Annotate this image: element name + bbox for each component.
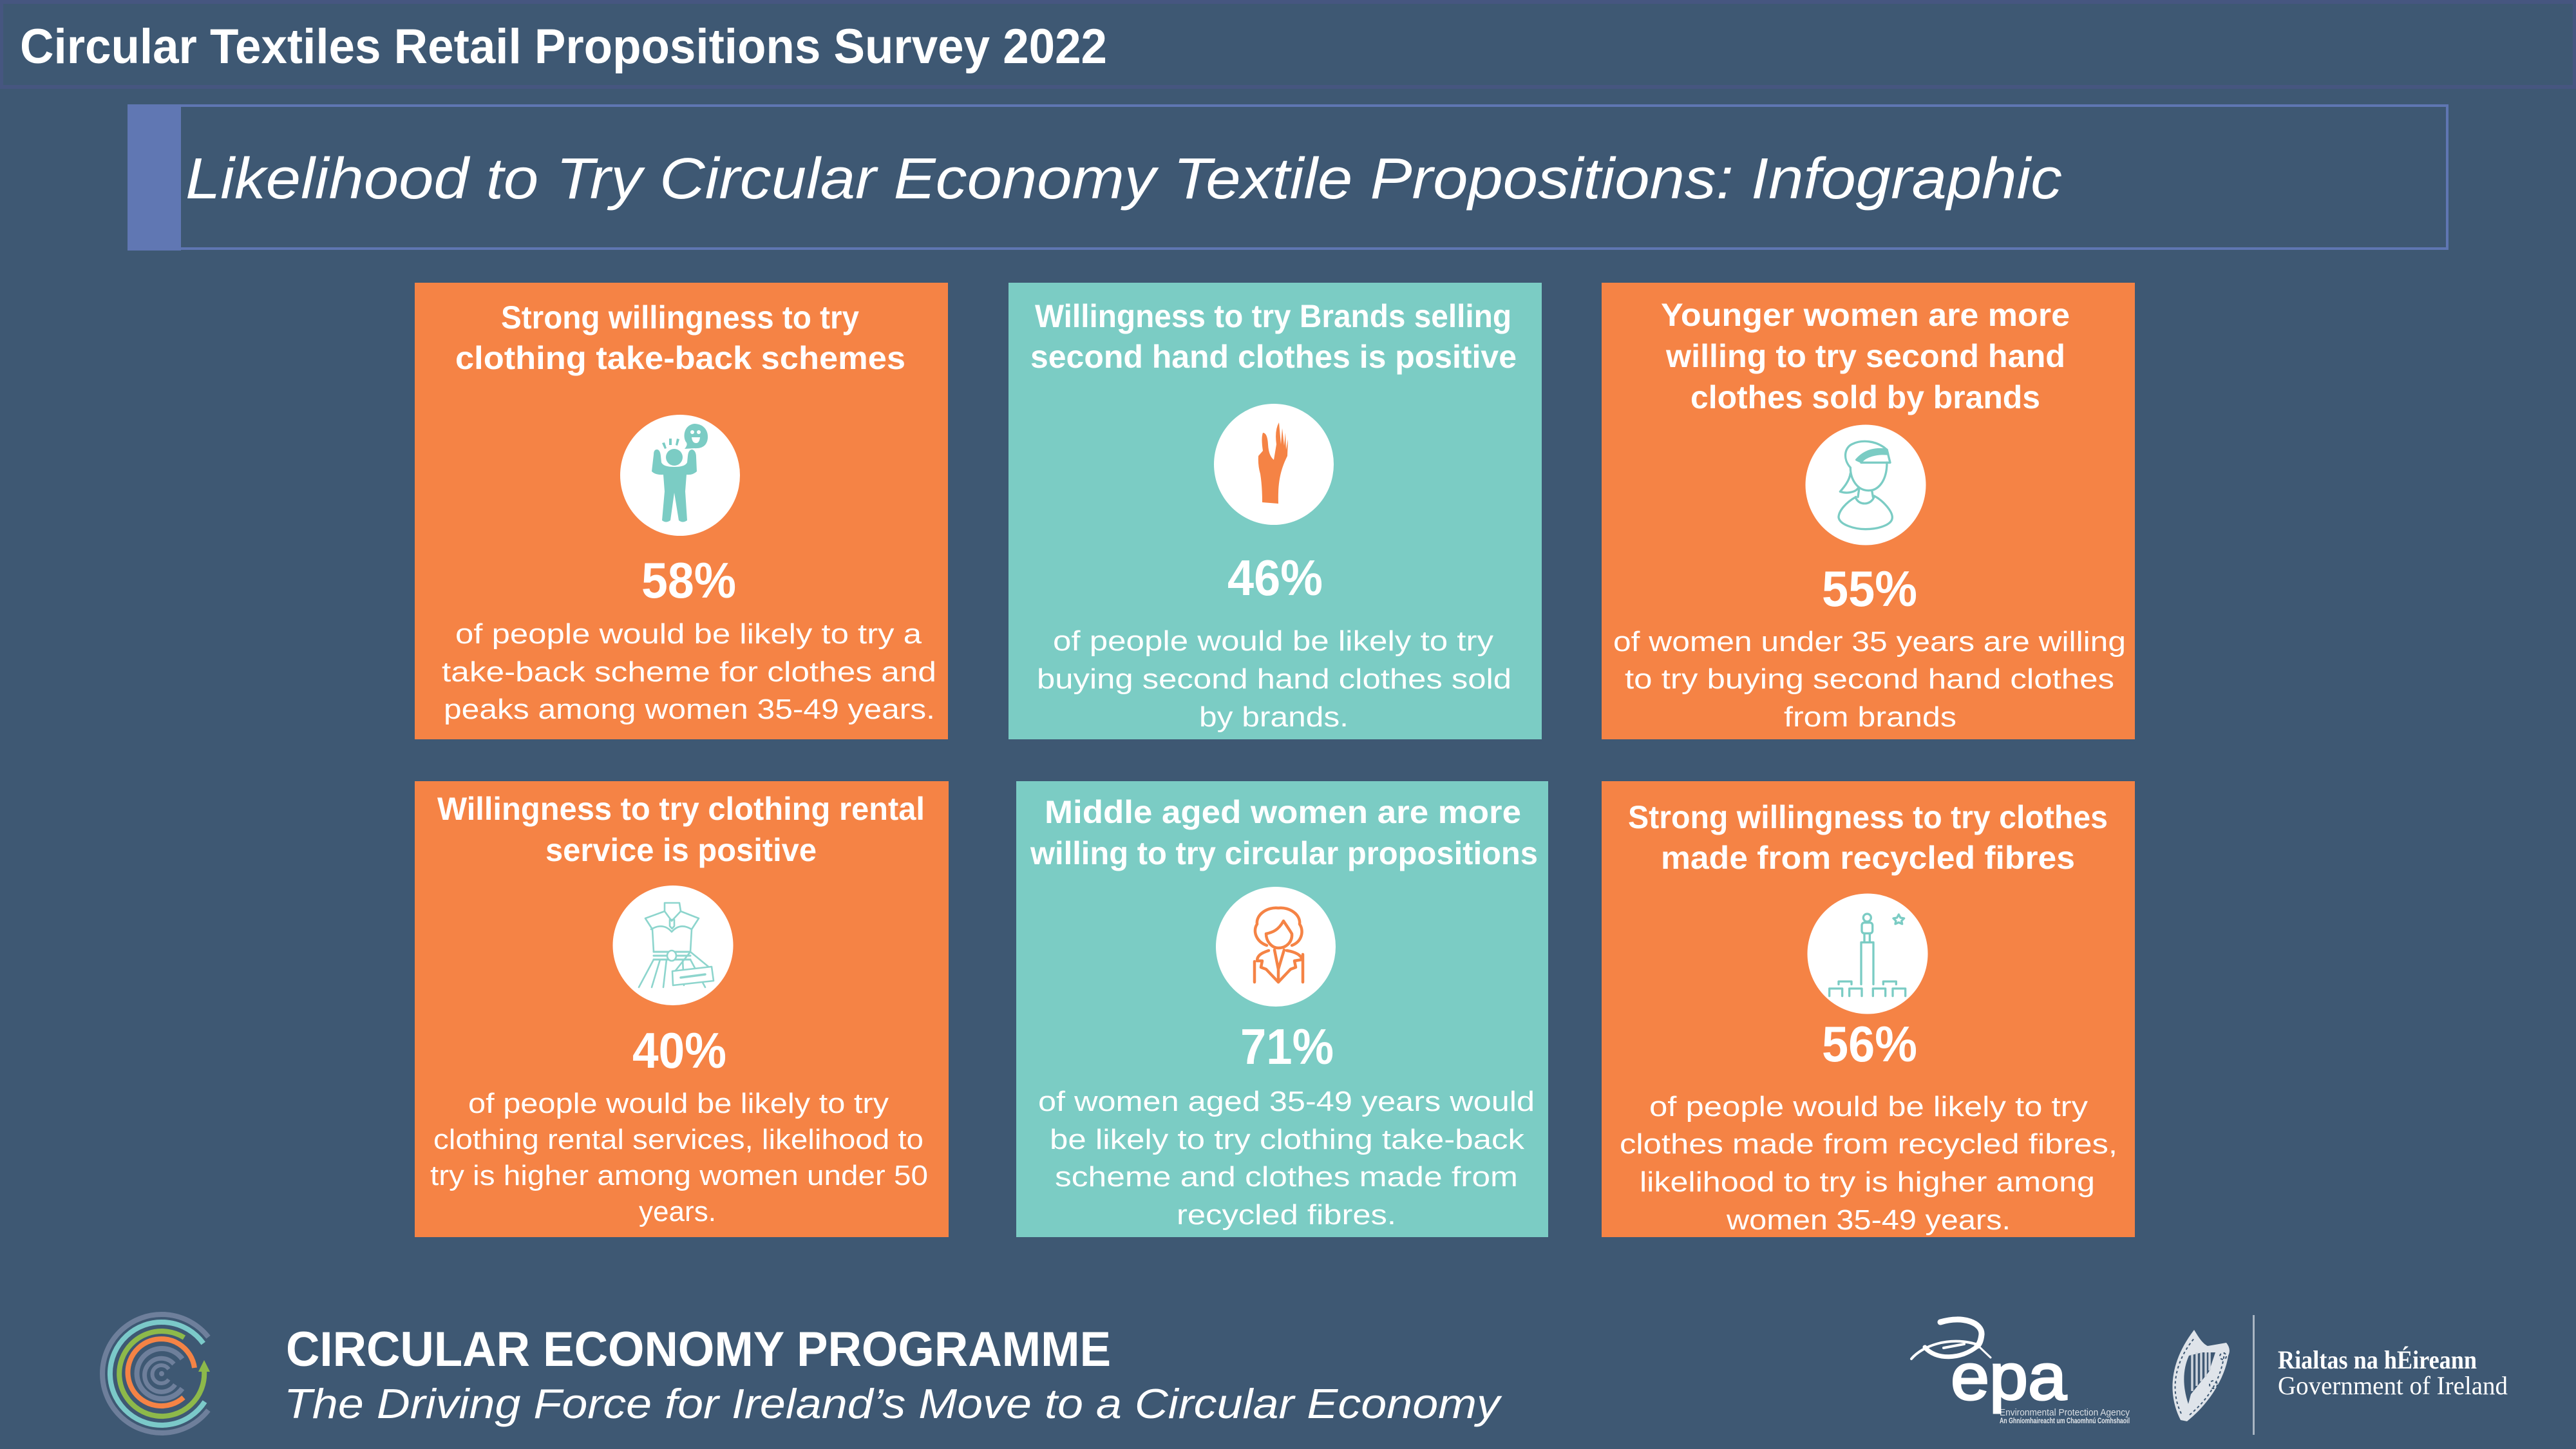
icon: young woman with headband <box>1806 425 1926 545</box>
body: recycled fibres: of people would be likely to try <box>1649 1091 2088 1122</box>
logo: EPA <box>1911 1320 2130 1425</box>
icon: raised hand <box>1214 404 1334 525</box>
heading: brands selling second hand <box>1030 298 1517 375</box>
heading: middle aged women: willing to try circular propositions <box>1030 835 1538 871</box>
subtitle panel <box>128 104 2447 251</box>
body: younger women: from brands <box>1784 701 1956 733</box>
body: brands selling second hand: by brands. <box>1199 701 1349 733</box>
heading: younger women <box>1661 297 2070 415</box>
panel: middle aged women <box>1016 781 1548 1237</box>
body: clothing rental: clothing rental services, likelihood to <box>433 1124 923 1155</box>
heading: recycled fibres: Strong willingness to try clothes <box>1628 799 2108 835</box>
logo: EPA: Environmental Protection Agency <box>2000 1407 2130 1418</box>
body: younger women <box>1613 626 2126 733</box>
body: clothing rental: of people would be likely to try <box>468 1088 889 1119</box>
icon: cheering person with speech bubble <box>620 415 740 536</box>
icon: professional woman <box>1216 887 1336 1007</box>
footer programme title: CIRCULAR ECONOMY PROGRAMME <box>286 1322 1111 1377</box>
logo: EPA: An Ghníomhaireacht um Chaomhnú Comhshaoil <box>2000 1416 2130 1425</box>
heading: clothing rental: Willingness to try clothing rental <box>437 791 925 827</box>
body: middle aged women <box>1038 1086 1535 1231</box>
logo: Government of Ireland wordmark <box>2278 1345 2508 1400</box>
heading: middle aged women <box>1030 794 1538 871</box>
heading: recycled fibres: made from recycled fibres <box>1661 840 2075 876</box>
panel: take-back schemes <box>415 283 948 739</box>
logo: Irish harp <box>2172 1330 2230 1421</box>
body: recycled fibres: likelihood to try is higher among <box>1640 1166 2095 1198</box>
footer tagline: The Driving Force for Ireland’s Move to a Circular Economy <box>284 1380 1502 1427</box>
stat: 56%: 56% <box>1822 1016 1917 1072</box>
body: brands selling second hand: buying second hand clothes sold <box>1037 663 1511 695</box>
body: clothing rental: try is higher among women under 50 <box>430 1160 928 1191</box>
heading: younger women: Younger women are more <box>1661 297 2070 333</box>
stat: 55%: 55% <box>1822 560 1917 617</box>
stat: 46%: 46% <box>1227 549 1323 606</box>
body: take-back schemes: take-back scheme for clothes and <box>442 656 936 688</box>
logo: Government of Ireland wordmark: Rialtas na hÉireann <box>2278 1345 2477 1374</box>
stat: 40%: 40% <box>632 1022 726 1079</box>
icon: dress and handbag <box>613 886 733 1005</box>
body: middle aged women: scheme and clothes made from <box>1055 1161 1518 1193</box>
body: clothing rental: years. <box>639 1196 716 1227</box>
header bar <box>1 2 2575 87</box>
body: take-back schemes: peaks among women 35-49 years. <box>444 694 935 725</box>
body: take-back schemes <box>442 618 936 725</box>
panel: brands selling second hand <box>1009 283 1542 739</box>
body: middle aged women: be likely to try clothing take-back <box>1050 1124 1525 1155</box>
main title: Circular Textiles Retail Propositions Survey 2022 <box>20 19 1107 74</box>
heading: clothing rental <box>437 791 925 868</box>
body: younger women: of women under 35 years are willing <box>1613 626 2126 658</box>
heading: brands selling second hand: Willingness to try Brands selling <box>1035 298 1511 334</box>
body: younger women: to try buying second hand clothes <box>1625 663 2114 695</box>
body: middle aged women: of women aged 35-49 years would <box>1038 1086 1535 1117</box>
heading: take-back schemes: Strong willingness to try <box>501 299 859 336</box>
body: recycled fibres: clothes made from recycled fibres, <box>1620 1128 2117 1160</box>
logo: Government of Ireland wordmark: Government of Ireland <box>2278 1371 2508 1400</box>
body: brands selling second hand: of people would be likely to try <box>1053 625 1493 657</box>
divider <box>2253 1315 2255 1435</box>
icon: circular economy logo <box>102 1314 210 1433</box>
heading: clothing rental: service is positive <box>545 832 817 868</box>
heading: take-back schemes: clothing take-back schemes <box>455 340 905 376</box>
panel: clothing rental <box>415 781 949 1237</box>
body: recycled fibres: women 35-49 years. <box>1726 1204 2011 1236</box>
stat: 71%: 71% <box>1240 1018 1334 1075</box>
heading: middle aged women: Middle aged women are more <box>1045 794 1521 830</box>
heading: younger women: clothes sold by brands <box>1690 379 2040 415</box>
body: take-back schemes: of people would be likely to try a <box>455 618 922 650</box>
heading: recycled fibres <box>1628 799 2108 876</box>
heading: brands selling second hand: second hand clothes is positive <box>1030 339 1517 375</box>
body: clothing rental <box>430 1088 928 1227</box>
subtitle: Likelihood to Try Circular Economy Textile Propositions: Infographic <box>185 147 2062 211</box>
panel: younger women <box>1602 283 2135 739</box>
logo: EPA: epa <box>1951 1340 2067 1414</box>
heading: take-back schemes <box>455 299 905 376</box>
body: middle aged women: recycled fibres. <box>1177 1199 1396 1231</box>
icon: monument with star <box>1807 894 1928 1014</box>
panel: recycled fibres <box>1602 781 2135 1237</box>
body: brands selling second hand <box>1037 625 1511 733</box>
stat: 58%: 58% <box>641 552 736 609</box>
body: recycled fibres <box>1620 1091 2117 1236</box>
heading: younger women: willing to try second hand <box>1665 338 2065 374</box>
